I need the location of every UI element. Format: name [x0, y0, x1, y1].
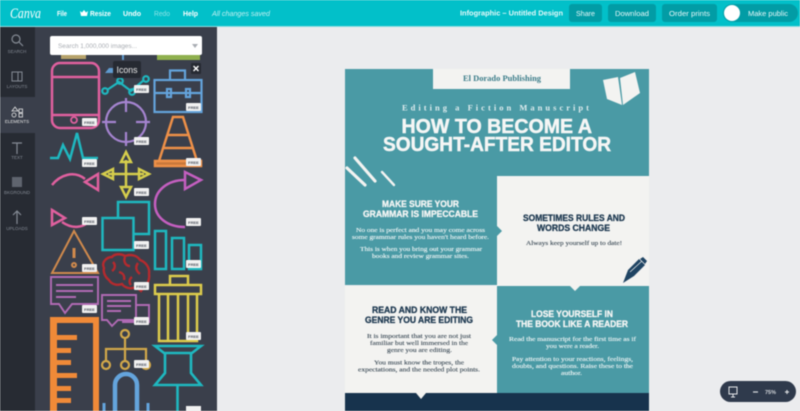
- icon: curved arrow left: [52, 210, 92, 227]
- body: genre: You must know the tropes, the: [374, 360, 464, 366]
- free badges: FREE: [84, 307, 95, 312]
- icon: crosshair: [102, 98, 150, 146]
- icon: curved arrow right: [52, 174, 98, 190]
- nav: layouts: [7, 72, 27, 89]
- search box: Search 1,000,000 images...: [58, 43, 137, 50]
- heading: rules: SOMETIMES RULES AND: [523, 213, 625, 224]
- icon: ruler: [50, 317, 99, 411]
- publisher tab: [433, 69, 570, 89]
- free badges: FREE: [84, 161, 95, 166]
- heading: grammar: [363, 199, 478, 220]
- button: Download: Download: [615, 11, 649, 18]
- icon: phone: [52, 63, 99, 128]
- main title: SOUGHT-AFTER EDITOR: [383, 134, 612, 156]
- menu: Redo: Redo: [154, 11, 170, 18]
- free badges: FREE: [136, 190, 147, 195]
- free badges: FREE: [136, 319, 147, 324]
- tooltip: Icons: Icons: [116, 65, 138, 75]
- icon: bars: [155, 231, 201, 269]
- publisher tab: El Dorado Publishing: [463, 73, 542, 83]
- panel: grammar: [345, 176, 502, 285]
- poster header band: [345, 69, 649, 177]
- kicker: Editing a Fiction Manuscript: [402, 102, 589, 112]
- heading: grammar: GRAMMAR IS IMPECCABLE: [363, 209, 478, 220]
- search box: [50, 36, 202, 55]
- icon: traffic cone: [155, 117, 201, 166]
- nav: uploads: [6, 211, 28, 231]
- heading: reader: LOSE YOURSELF IN: [531, 309, 613, 320]
- nav: uploads: UPLOADS: [6, 226, 28, 231]
- button: Download: [608, 4, 656, 22]
- partial icons behind search: [61, 54, 200, 73]
- icon: speech bubble: [51, 277, 98, 313]
- nav: elements: ELEMENTS: [5, 119, 29, 124]
- icon: overlapping squares: [102, 202, 149, 250]
- button: Share: Share: [576, 11, 595, 18]
- icon: presentation: [729, 387, 737, 397]
- button: Order prints: Order prints: [669, 11, 711, 18]
- icon: pen: [623, 257, 647, 283]
- menu: Undo: Undo: [123, 11, 141, 18]
- poster: [345, 69, 649, 411]
- free badges: FREE: [84, 120, 95, 125]
- icon: trash can: [155, 276, 201, 341]
- nav: layouts: LAYOUTS: [7, 84, 27, 89]
- icon: magnet: [104, 374, 148, 411]
- body: grammar: This is when you bring out your grammar: [360, 246, 483, 253]
- body: genre: [358, 333, 480, 374]
- menu: Help: Help: [183, 11, 198, 18]
- tooltip: Icons: [113, 61, 141, 78]
- nav: text: [11, 143, 23, 160]
- panel: reader: [492, 286, 649, 394]
- nav: background: [4, 177, 31, 195]
- icon: large curved arrow: [155, 172, 201, 227]
- toggle: Make public: [723, 4, 798, 22]
- icon: four-way arrows: [103, 152, 149, 197]
- menu: File: File: [57, 11, 67, 18]
- close button: [191, 63, 201, 74]
- body: genre: familiar but well immersed in the: [370, 340, 468, 347]
- heading: reader: [516, 309, 628, 330]
- body: genre: It is important that you are not just: [367, 333, 471, 340]
- free badges: FREE: [188, 160, 199, 165]
- body: genre: genre you are editing.: [387, 347, 452, 354]
- icon: brain: [103, 254, 149, 291]
- main title: HOW TO BECOME A: [402, 116, 592, 138]
- icon: line graph: [102, 76, 149, 95]
- icon: pulse line: [50, 133, 98, 159]
- free badges: FREE: [188, 105, 199, 110]
- icon: org chart: [102, 330, 150, 369]
- body: grammar: No one is perfect and you may come across: [356, 227, 486, 234]
- left navigation rail: [0, 27, 35, 411]
- heading: genre: [365, 305, 473, 326]
- button: Share: [569, 4, 602, 22]
- body: reader: you were a reader.: [546, 343, 599, 350]
- heading: genre: GENRE YOU ARE EDITING: [365, 315, 473, 326]
- body: grammar: [352, 227, 489, 260]
- body: reader: doubts, and questions. Raise these to the: [512, 363, 633, 370]
- free badges: FREE: [188, 262, 199, 267]
- body: grammar: books and review grammar sites.: [372, 253, 469, 260]
- heading: reader: THE BOOK LIKE A READER: [516, 319, 628, 330]
- zoom level: 75%: [765, 390, 776, 396]
- nav: search: SEARCH: [8, 49, 26, 54]
- nav: search: [8, 35, 26, 54]
- toggle: Make public: Make public: [748, 11, 789, 18]
- free badges: FREE: [136, 362, 147, 367]
- free badges: FREE: [188, 220, 199, 225]
- free badges: FREE: [136, 243, 147, 248]
- icon: warning triangle: [52, 231, 98, 273]
- body: reader: [509, 336, 637, 377]
- body: reader: author.: [561, 370, 582, 377]
- free badges: FREE: [136, 284, 147, 289]
- nav: text: TEXT: [11, 155, 23, 160]
- zoom control: [720, 381, 796, 402]
- free badges: [82, 85, 201, 411]
- heading: grammar: MAKE SURE YOUR: [382, 199, 459, 210]
- top toolbar: [0, 0, 800, 27]
- icon: pushpin: [155, 346, 201, 411]
- heading: rules: [523, 213, 625, 234]
- logo: Canva: Canva: [10, 6, 41, 22]
- icon: briefcase: [154, 70, 202, 112]
- main title: [383, 116, 612, 156]
- panel: genre: [345, 286, 497, 394]
- free badges: FREE: [136, 139, 147, 144]
- body: rules: Always keep yourself up to date!: [526, 240, 622, 247]
- footer band: [345, 393, 649, 411]
- menu: Resize: [80, 10, 111, 18]
- body: reader: Read the manuscript for the first time as if: [509, 336, 637, 343]
- heading: genre: READ AND KNOW THE: [372, 305, 467, 316]
- body: grammar: some grammar rules you haven't heard before.: [352, 234, 489, 241]
- free badges: FREE: [136, 87, 147, 92]
- icon: double speech bubble: [102, 295, 149, 326]
- free badges: FREE: [84, 266, 95, 271]
- body: reader: Pay attention to your reactions, feelings,: [512, 356, 633, 363]
- elements panel: [35, 27, 217, 411]
- document title: Infographic – Untitled Design: [460, 10, 563, 18]
- save status: All changes saved: [211, 11, 271, 18]
- button: Order prints: [662, 4, 717, 22]
- free badges: FREE: [188, 334, 199, 339]
- free badges: FREE: [84, 219, 95, 224]
- icon: open book: [603, 72, 640, 105]
- menu: Resize: Resize: [90, 11, 111, 18]
- nav: elements: [5, 107, 29, 124]
- heading: rules: WORDS CHANGE: [537, 223, 610, 234]
- body: genre: expectations, and the needed plot points.: [358, 366, 480, 374]
- icon: pencils: [347, 158, 394, 185]
- panel: rules: [497, 176, 649, 286]
- nav: background: BKGROUND: [4, 190, 31, 195]
